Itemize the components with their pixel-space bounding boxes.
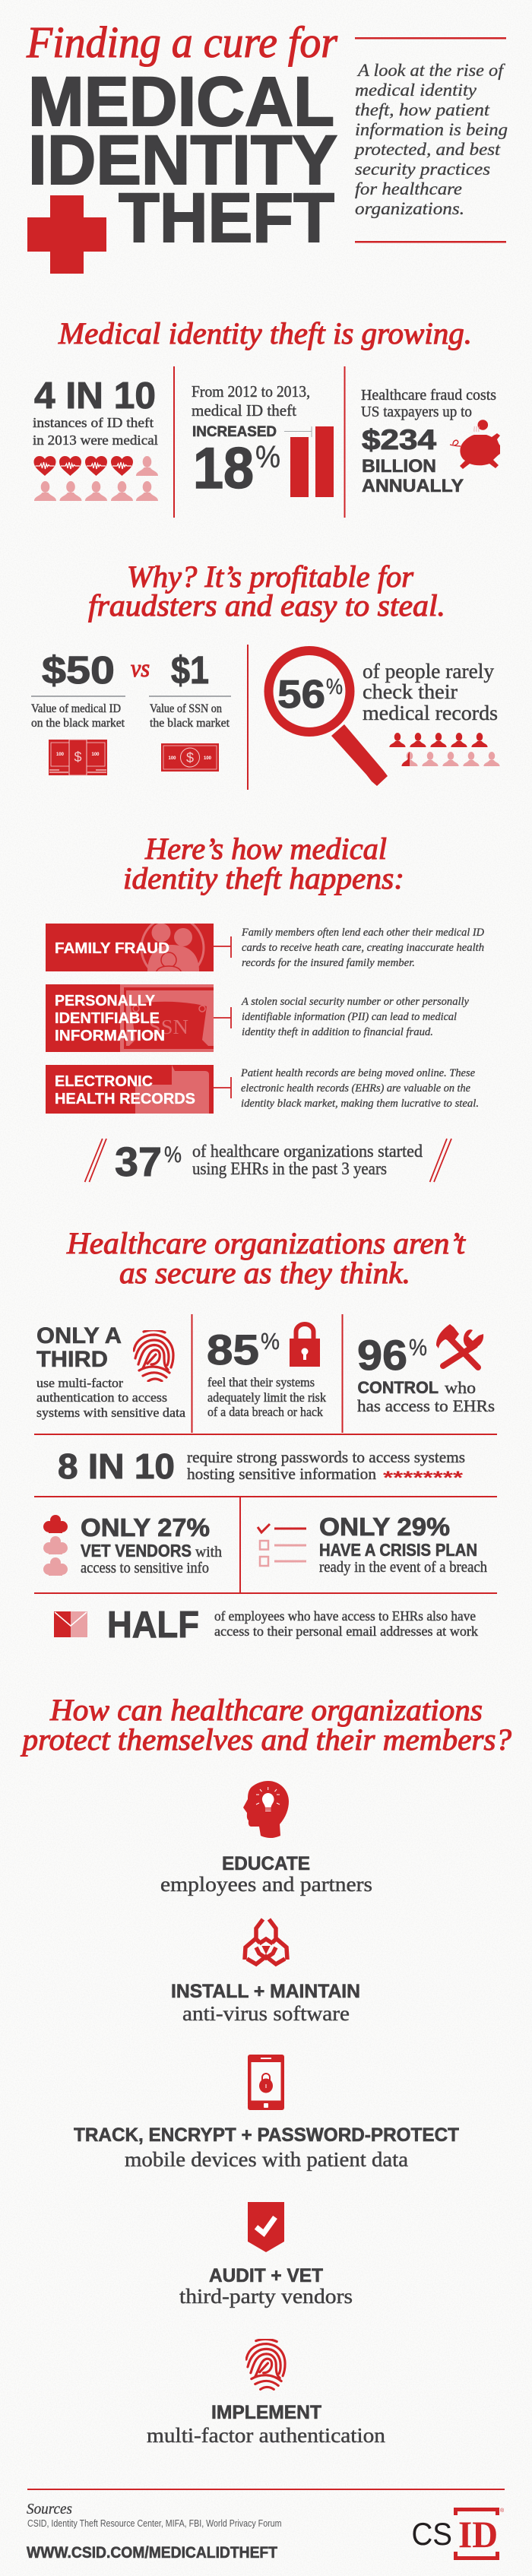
icon: padlock [290,1324,320,1367]
stat: increased 18%: From 2012 to 2013, [192,382,310,401]
section: how to protect [20,1693,511,2447]
stat: healthcare fraud cost: $234 [362,424,437,455]
icon: single bill: $ [186,750,194,765]
intro text block [353,37,508,243]
icon: fingerprint [134,1330,173,1381]
bar chart: increase [284,426,334,497]
heading: not as secure: as secure as they think. [119,1256,410,1290]
logo: CSID: CS [412,2516,452,2552]
panel: electronic health records: electronic health records (EHRs) are valuable on the [241,1082,470,1095]
stat: $1 value of SSN: Value of SSN on [150,702,222,715]
icon: folder [135,1065,209,1114]
stat: half: access to their personal email addresses at work [214,1624,478,1639]
logo: CSID [412,2508,505,2560]
stat: $50 value of medical ID: Value of medical ID [31,702,121,715]
stat: only a third: systems with sensitive data [36,1405,185,1420]
vs label: vs [131,655,150,683]
intro text block: protected, and best [353,140,501,159]
heading: how it happens: identity theft happens: [123,861,404,895]
stat: 96%: who [445,1378,476,1397]
icon: stack of bills: 100 [91,753,100,757]
stat: half: HALF [107,1605,199,1646]
stat: healthcare fraud cost: BILLION [362,456,436,477]
panel: family fraud: cards to receive heath care, creating inaccurate health [242,942,484,954]
stat: 8 in 10: require strong passwords to access systems [187,1448,465,1466]
stat: 96%: CONTROL [357,1378,439,1397]
stat: 85% [207,1324,326,1419]
stat: 56% magnifier: 56 [277,673,325,717]
item: install and maintain [171,1919,360,2025]
stat: only 27%: with [195,1544,222,1560]
stat: 56% magnifier: of people rarely [363,660,494,683]
stat: healthcare fraud cost: ANNUALLY [362,476,464,496]
icon: single bill [161,743,219,772]
stat: only 29% [258,1513,487,1576]
section: how it happens [46,832,484,1185]
icon: single bill: 100 [204,756,212,761]
sources: CSID, Identity Theft Resource Center, MIFA, FBI, World Privacy Forum [27,2518,281,2529]
item: track encrypt protect: TRACK, ENCRYPT + PASSWORD-PROTECT [74,2124,459,2146]
stat: $50 value of medical ID: on the black market [31,717,125,730]
stat: only a third: THIRD [36,1347,108,1372]
stat: 56% magnifier: % [326,675,343,699]
stat: 85%: % [261,1328,280,1355]
stat: 8 in 10: ******** [383,1468,464,1488]
stat: only 29%: HAVE A CRISIS PLAN [319,1540,477,1560]
panel: personally identifiable information [46,984,469,1052]
heading: how to protect: How can healthcare organizations [49,1693,483,1727]
stat: $1 value of SSN: the black market [150,717,230,730]
stat: healthcare fraud cost: US taxpayers up to [361,404,472,420]
sources: Sources [27,2501,72,2517]
intro text block: theft, how patient [355,100,490,119]
item: audit and vet [179,2202,353,2308]
icon: fingerprint [246,2339,285,2389]
stat: $1 value of SSN [149,648,231,772]
stat: $50 value of medical ID [31,648,125,775]
logo: CSID: ID [458,2513,498,2555]
stat: increased 18%: medical ID theft [192,401,296,420]
heading: growing: Medical identity theft is growing. [58,316,472,350]
item: audit and vet: third-party vendors [179,2285,353,2308]
icon: vendor clouds [43,1515,68,1576]
panel: electronic health records: ELECTRONIC [55,1073,153,1090]
stat: 85%: feel that their systems [207,1375,315,1389]
item: implement: multi-factor authentication [147,2424,386,2447]
heading: how it happens: Here’s how medical [144,832,387,866]
title: medical identity theft: THEFT [119,179,334,257]
heading: how to protect [20,1693,511,1757]
item: implement [147,2339,386,2447]
intro text block: organizations. [355,199,464,218]
icon: head with lightbulb [243,1781,289,1838]
icon: people and hearts [33,456,158,501]
stat: only 27%: ONLY 27% [81,1513,210,1541]
item: track encrypt protect: mobile devices with patient data [125,2148,408,2171]
panel: personally identifiable information: A stolen social security number or other personally [241,996,469,1008]
stat: half [54,1605,478,1646]
stat: 96%: 96 [357,1331,407,1379]
panel: family fraud [46,924,484,971]
icon: stack of bills: 100 [56,753,65,757]
icon: family [140,924,205,971]
stat: 56% magnifier: check their [363,680,458,703]
heading: why profitable: Why? It’s profitable for [127,559,413,594]
icon: people row [389,733,500,766]
stat: only 29%: ONLY 29% [319,1513,450,1541]
icon: shield with check [248,2202,284,2252]
stat: increased 18%: % [255,439,280,474]
panel: personally identifiable information: INFORMATION [55,1028,165,1044]
title: medical identity theft: IDENTITY [28,122,337,199]
panel: electronic health records: identity black market, making them lucrative to steal. [241,1098,479,1110]
item: audit and vet: AUDIT + VET [209,2265,323,2286]
stat: 96% [357,1324,495,1415]
heading: why profitable [88,559,445,623]
stat: 4 in 10 [33,375,158,501]
stat: only a third [36,1323,185,1420]
title: medical identity theft [28,63,337,257]
stat: 37% callout: % [164,1142,182,1168]
stat: increased 18%: INCREASED [192,424,277,440]
stat: only 27%: access to sensitive info [81,1560,209,1576]
intro text block: for healthcare [355,179,462,198]
stat: 37% callout: using EHRs in the past 3 years [192,1159,387,1178]
url: WWW.CSID.COM/MEDICALIDTHEFT [27,2544,277,2562]
icon: social security card: SSN [149,1016,188,1038]
section: not as secure [34,1226,497,1646]
stat: 8 in 10: hosting sensitive information [187,1465,376,1483]
section: growing [33,316,500,518]
stat: 85%: 85 [207,1326,259,1374]
stat: increased 18% [192,382,334,501]
panel: electronic health records: Patient health records are being moved online. These [240,1067,475,1079]
stat: 4 in 10: instances of ID theft [33,415,154,430]
stat: 37% callout [85,1139,451,1185]
stat: only a third: ONLY A [36,1323,122,1348]
icon: checklist [258,1524,306,1566]
stat: 37% callout: of healthcare organizations started [192,1142,423,1161]
item: educate: EDUCATE [222,1853,310,1874]
stat: 4 in 10: in 2013 were medical [33,433,158,448]
intro text block: A look at the rise of [356,61,506,80]
intro text block: medical identity [355,81,477,100]
icon: magnifying glass [269,651,388,786]
stat: only a third: authentication to access [36,1390,167,1405]
heading: how it happens [123,832,404,895]
item: educate [160,1781,372,1896]
stat: 4 in 10: 4 IN 10 [34,375,156,417]
icon: hammer and wrench [436,1324,483,1367]
stat: 8 in 10: 8 IN 10 [58,1446,175,1486]
sources [27,2501,281,2529]
panel: personally identifiable information: identifiable information (PII) can lead to medical [242,1011,457,1023]
stat: 37% callout: 37 [115,1139,162,1185]
stat: healthcare fraud cost [361,387,500,496]
stat: only a third: use multi-factor [36,1376,123,1390]
item: install and maintain: anti-virus software [182,2002,350,2025]
intro text block: security practices [355,160,490,179]
stat: 85%: of a data breach or hack [207,1405,323,1419]
stat: only 27% [43,1513,222,1576]
heading: not as secure [66,1226,466,1290]
intro text block: information is being [355,120,508,139]
stat: 96%: % [409,1334,427,1361]
icon: stack of bills: $ [74,749,82,765]
heading: why profitable: fraudsters and easy to steal. [88,588,445,623]
icon: social security card [120,984,214,1052]
icon: envelope [54,1611,87,1637]
stat: 56% magnifier: medical records [363,702,498,724]
stat: 8 in 10 [58,1446,465,1488]
item: track encrypt protect [74,2055,459,2171]
logo: CSID: ® [500,2508,505,2514]
item: educate: employees and partners [160,1873,372,1896]
stat: 85%: adequately limit the risk [207,1390,326,1405]
footer [27,2489,505,2562]
panel: electronic health records [46,1065,479,1114]
stat: increased 18%: 18 [193,436,254,501]
stat: healthcare fraud cost: Healthcare fraud costs [361,387,496,404]
header [26,17,508,274]
panel: personally identifiable information: PERSONALLY [55,993,156,1009]
stat: $1 value of SSN: $1 [171,648,209,692]
panel: electronic health records: HEALTH RECORDS [55,1091,195,1107]
title kicker: Finding a cure for [26,17,337,67]
panel: family fraud: FAMILY FRAUD [55,940,169,957]
panel: personally identifiable information: IDENTIFIABLE [55,1010,160,1027]
section: profitable [31,559,500,790]
title: medical identity theft: MEDICAL [28,63,334,141]
panel: personally identifiable information: identity theft in addition to financial fraud. [242,1026,433,1038]
icon: stack of bills [49,740,107,775]
panel: family fraud: records for the insured family member. [242,957,415,969]
icon: piggy bank [450,420,500,469]
icon: biohazard [245,1919,287,1964]
item: install and maintain: INSTALL + MAINTAIN [171,1981,360,2002]
heading: not as secure: Healthcare organizations aren’t [66,1226,466,1260]
stat: 56% magnifier [269,651,500,786]
panel: family fraud: Family members often lend each other their medical ID [241,927,484,939]
stat: half: of employees who have access to EHRs also have [214,1608,476,1624]
stat: only 27%: VET VENDORS [81,1541,192,1560]
stat: $50 value of medical ID: $50 [42,648,115,692]
stat: only 29%: ready in the event of a breach [319,1559,487,1576]
icon: locked phone [248,2055,284,2110]
heading: how to protect: protect themselves and their members? [20,1722,511,1757]
item: implement: IMPLEMENT [211,2402,321,2423]
stat: 96%: has access to EHRs [357,1396,495,1415]
icon: red medical cross [27,195,106,274]
icon: single bill: 100 [168,756,176,761]
